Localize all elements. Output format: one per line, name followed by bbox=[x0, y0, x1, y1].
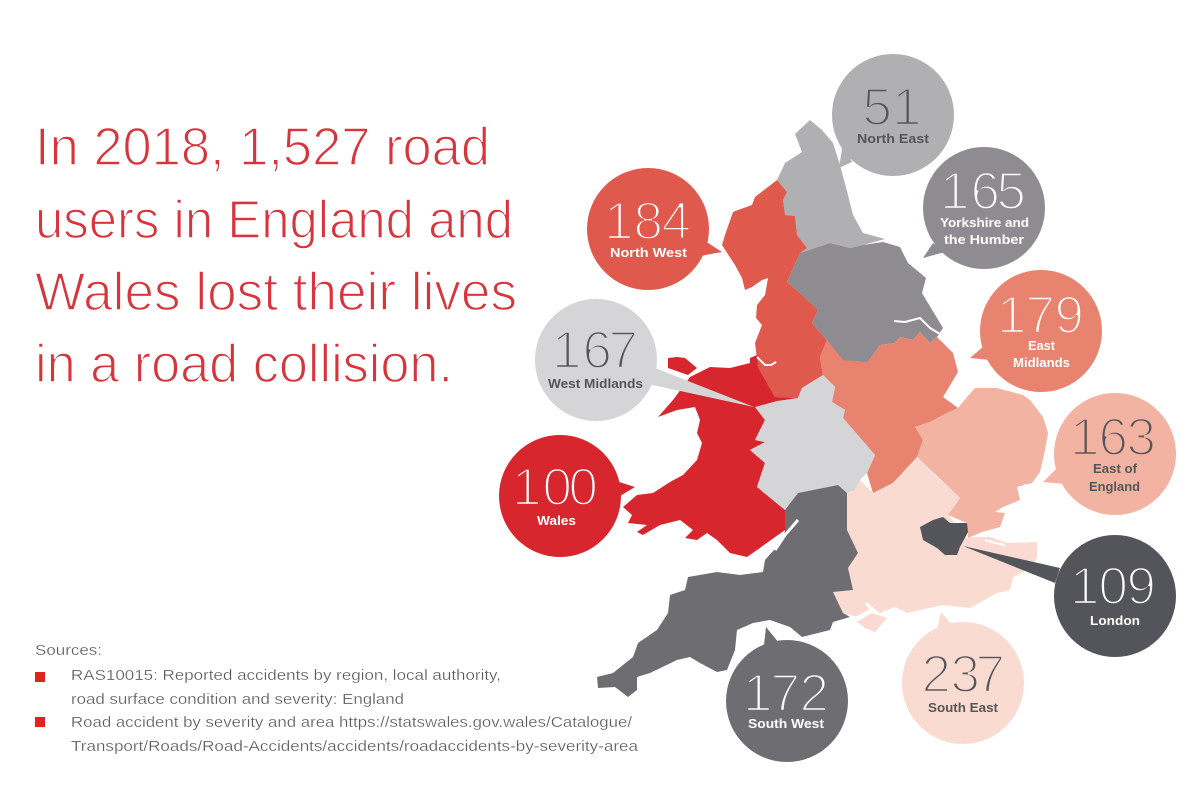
callout: South East 237: 237 bbox=[922, 645, 1005, 704]
callout: North East 51: North East bbox=[857, 132, 930, 146]
region: Yorkshire and the Humber bbox=[787, 242, 943, 362]
sources block: RAS10015: Reported accidents by region, local authority, bbox=[71, 668, 501, 684]
callout: South East 237 bbox=[902, 612, 1024, 744]
map of England and Wales regions bbox=[597, 120, 1048, 697]
sources block: road surface condition and severity: England bbox=[71, 692, 404, 708]
region: North East bbox=[777, 120, 885, 253]
callout: North West 184 bbox=[587, 168, 722, 290]
region: East of England bbox=[915, 388, 1048, 538]
region: Wales bbox=[623, 355, 798, 557]
callout: South West 172: South West bbox=[748, 717, 825, 731]
region: West Midlands bbox=[750, 375, 875, 510]
callout: East of England 163: England bbox=[1089, 480, 1140, 494]
title: users in England and bbox=[35, 190, 513, 250]
callout: South West 172: 172 bbox=[743, 664, 829, 723]
callout: North East 51 bbox=[832, 54, 954, 176]
callout: London 109: 109 bbox=[1070, 557, 1156, 616]
callout: Yorkshire and the Humber 165: Yorkshire and bbox=[940, 216, 1029, 230]
region: North West bbox=[722, 180, 827, 398]
callout: North West 184: North West bbox=[610, 246, 688, 260]
callout: North East 51: 51 bbox=[862, 78, 921, 137]
callout: East Midlands 179: Midlands bbox=[1013, 356, 1070, 370]
sources block: Road accident by severity and area https://statswales.gov.wales/Catalogue/ bbox=[71, 715, 633, 731]
callout: East of England 163 bbox=[1043, 393, 1176, 515]
callout: Yorkshire and the Humber 165: 165 bbox=[940, 162, 1026, 221]
callout: Yorkshire and the Humber 165 bbox=[923, 147, 1045, 269]
title bbox=[35, 117, 517, 394]
callout: Wales 100 bbox=[499, 435, 635, 557]
title: in a road collision. bbox=[35, 334, 453, 394]
callout: East Midlands 179 bbox=[970, 270, 1102, 392]
sources block bbox=[35, 643, 639, 755]
callout: London 109 bbox=[963, 535, 1176, 657]
sources block: Transport/Roads/Road-Accidents/accidents/roadaccidents-by-severity-area bbox=[71, 739, 639, 755]
callout: East Midlands 179: East bbox=[1028, 339, 1056, 353]
callout: North West 184: 184 bbox=[604, 192, 691, 251]
callout: East of England 163: 163 bbox=[1070, 408, 1156, 467]
region: East Midlands bbox=[820, 332, 958, 493]
region: South West bbox=[597, 485, 858, 697]
callout: West Midlands 167: 167 bbox=[552, 321, 638, 380]
callout: Wales 100: Wales bbox=[537, 514, 576, 528]
callout: East Midlands 179: 179 bbox=[997, 286, 1084, 345]
callout: Yorkshire and the Humber 165: the Humber bbox=[944, 233, 1024, 247]
callout: South West 172 bbox=[726, 627, 848, 762]
callout: West Midlands 167 bbox=[535, 299, 754, 421]
sources block: Sources: bbox=[35, 643, 102, 659]
callout: West Midlands 167: West Midlands bbox=[548, 377, 643, 391]
callout: South East 237: South East bbox=[928, 701, 999, 715]
title: Wales lost their lives bbox=[35, 262, 517, 322]
callout: East of England 163: East of bbox=[1093, 462, 1138, 476]
region: London bbox=[920, 517, 968, 555]
estuaries bbox=[757, 318, 1040, 618]
region: South East bbox=[833, 457, 1037, 632]
title: In 2018, 1,527 road bbox=[35, 117, 490, 177]
callout: London 109: London bbox=[1090, 614, 1140, 628]
callout: Wales 100: 100 bbox=[512, 458, 598, 517]
